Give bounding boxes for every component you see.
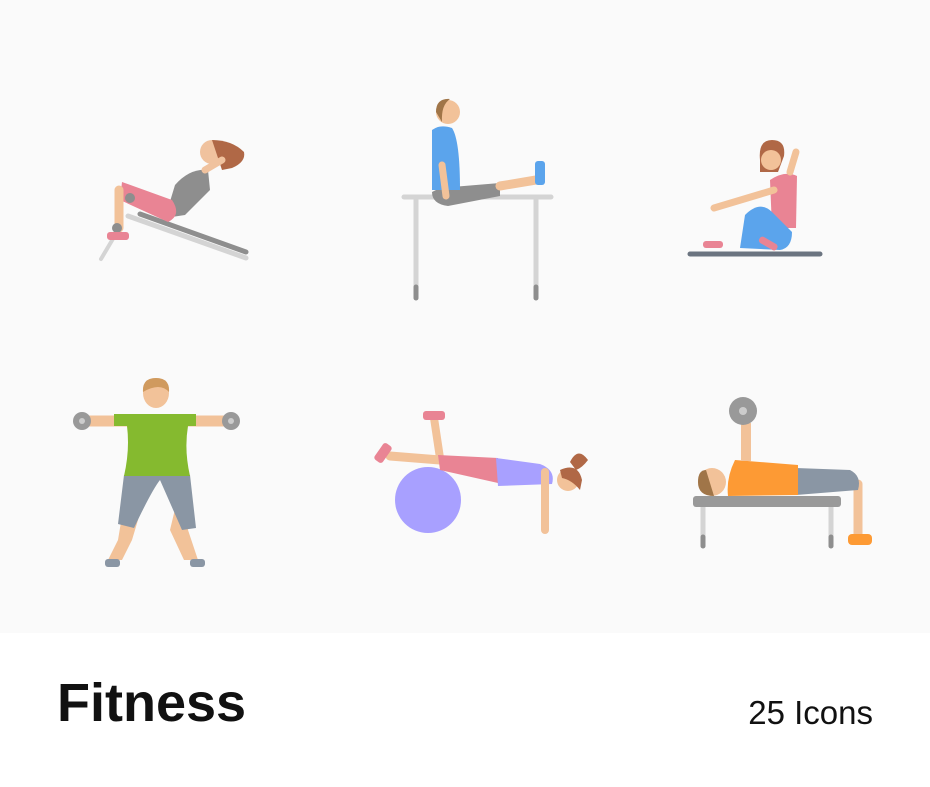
icon count: 25 Icons bbox=[748, 694, 873, 731]
icon: stability ball plank bbox=[373, 411, 588, 533]
icon: bench press bbox=[693, 397, 872, 546]
icon: seated twist stretch bbox=[690, 140, 820, 254]
title: Fitness bbox=[57, 673, 246, 733]
icon: incline sit-up bbox=[101, 140, 246, 259]
icon: dumbbell lateral raise bbox=[73, 378, 240, 567]
icon: parallel bar leg raise bbox=[404, 99, 551, 298]
